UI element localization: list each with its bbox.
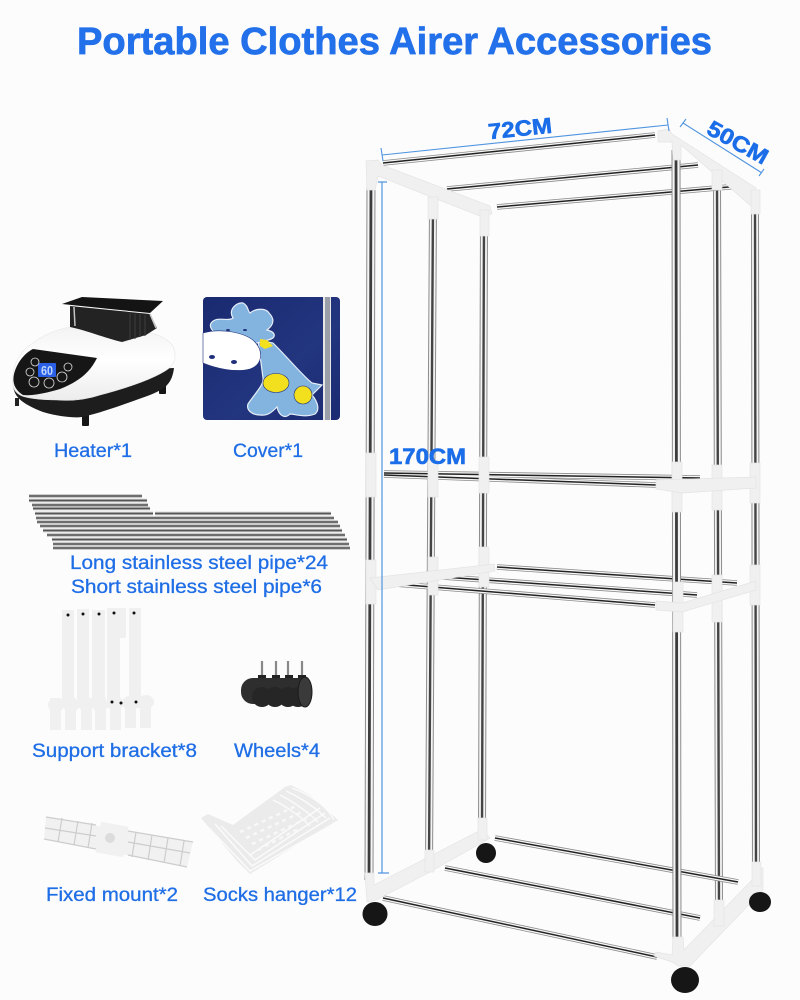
rack frame <box>362 129 771 993</box>
dimension: 50cm <box>680 116 773 176</box>
title: Portable Clothes Airer Accessories <box>77 21 712 63</box>
icon: support brackets <box>48 608 154 730</box>
icon: stainless steel pipes <box>29 496 350 548</box>
dimension: 72cm <box>381 113 669 161</box>
icon: cover with giraffe <box>203 297 340 420</box>
wheel: front right <box>671 967 699 993</box>
caster wheels <box>362 843 771 993</box>
label: fixed mount: Fixed mount*2 <box>46 885 178 906</box>
horizontal bars <box>383 135 740 957</box>
icon: wheels <box>241 661 312 707</box>
back posts <box>429 180 756 910</box>
wheel: front left <box>362 902 388 926</box>
plastic joints and end bands <box>365 129 763 966</box>
dimension: 50cm: 50CM <box>703 116 773 169</box>
icon: socks hanger <box>201 785 338 874</box>
label: short pipe: Short stainless steel pipe*6 <box>71 577 322 598</box>
icon: heater: 60 <box>41 363 53 378</box>
icon: heater <box>13 297 175 426</box>
front posts <box>369 150 677 945</box>
dimension: 72cm: 72CM <box>487 113 553 144</box>
label: support bracket: Support bracket*8 <box>32 741 197 762</box>
wheel: back right <box>749 892 771 912</box>
icon: fixed mount <box>44 817 193 867</box>
label: long pipe: Long stainless steel pipe*24 <box>70 553 328 574</box>
dimension: 170cm <box>378 182 466 873</box>
label: cover: Cover*1 <box>233 441 303 462</box>
wheel: back left <box>476 843 496 863</box>
label: heater: Heater*1 <box>54 441 132 462</box>
dimension: 170cm: 170CM <box>389 444 466 469</box>
label: wheels: Wheels*4 <box>234 741 320 762</box>
label: socks hanger: Socks hanger*12 <box>203 885 357 906</box>
